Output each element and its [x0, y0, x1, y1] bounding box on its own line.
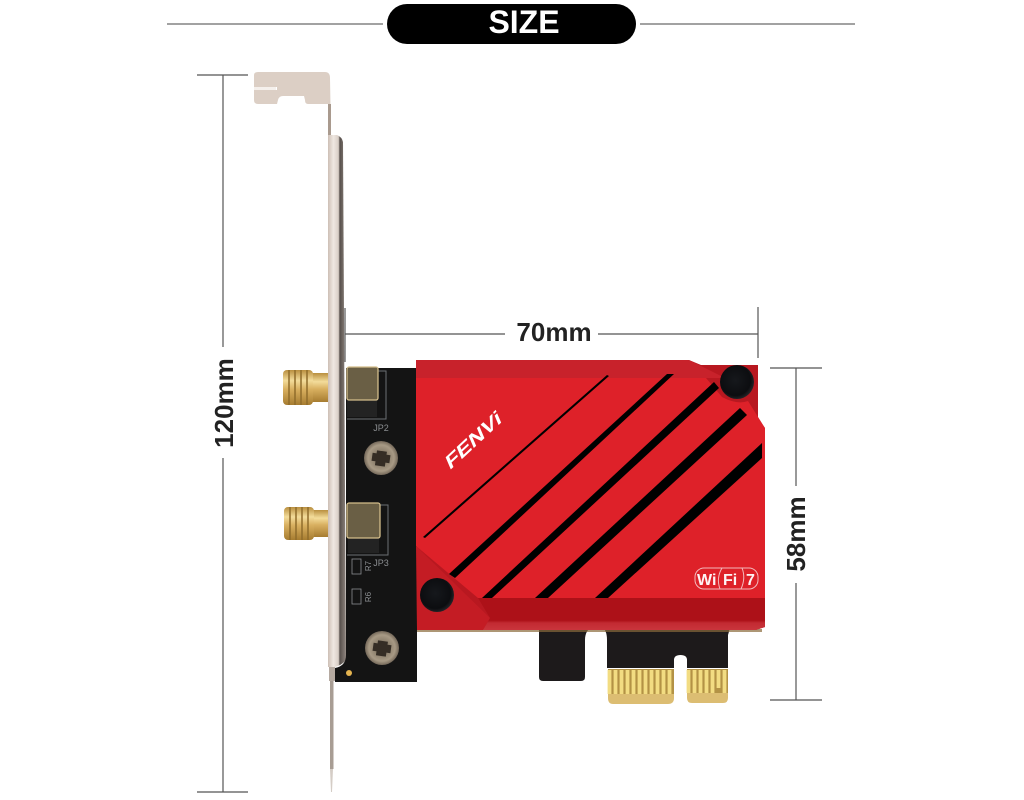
board markings: R7 — [364, 560, 373, 571]
board markings — [346, 371, 389, 676]
brand logo: FENVi — [443, 405, 504, 474]
board screw: top — [364, 441, 398, 475]
rubber standoff: bottom — [420, 578, 454, 612]
board screw: bottom — [365, 631, 399, 665]
Wi-Fi 7 badge: 7 — [746, 572, 755, 589]
dimension: 120mm height: 120mm — [209, 358, 239, 448]
Wi-Fi 7 badge: Wi — [697, 572, 716, 589]
PCIe edge connector — [539, 628, 730, 704]
antenna connector: bottom — [284, 503, 380, 553]
heatsink stripes — [423, 374, 762, 598]
board markings: R6 — [364, 591, 373, 602]
dimension: 70mm width: 70mm — [516, 317, 592, 347]
Wi-Fi 7 badge — [695, 568, 758, 589]
title bar — [167, 4, 855, 44]
dimension: 58mm height: 58mm — [781, 496, 811, 572]
metal bracket — [254, 72, 346, 792]
circuit board — [335, 368, 417, 682]
board markings: JP3 — [373, 558, 389, 568]
title bar: SIZE — [488, 4, 560, 40]
Wi-Fi 7 badge: Fi — [723, 572, 737, 589]
board markings: JP2 — [373, 423, 389, 433]
rubber standoff: top — [720, 365, 754, 399]
antenna connector: top — [283, 367, 378, 417]
red heatsink — [416, 360, 765, 632]
product: Wi-Fi 7 PCIe card — [254, 72, 765, 792]
